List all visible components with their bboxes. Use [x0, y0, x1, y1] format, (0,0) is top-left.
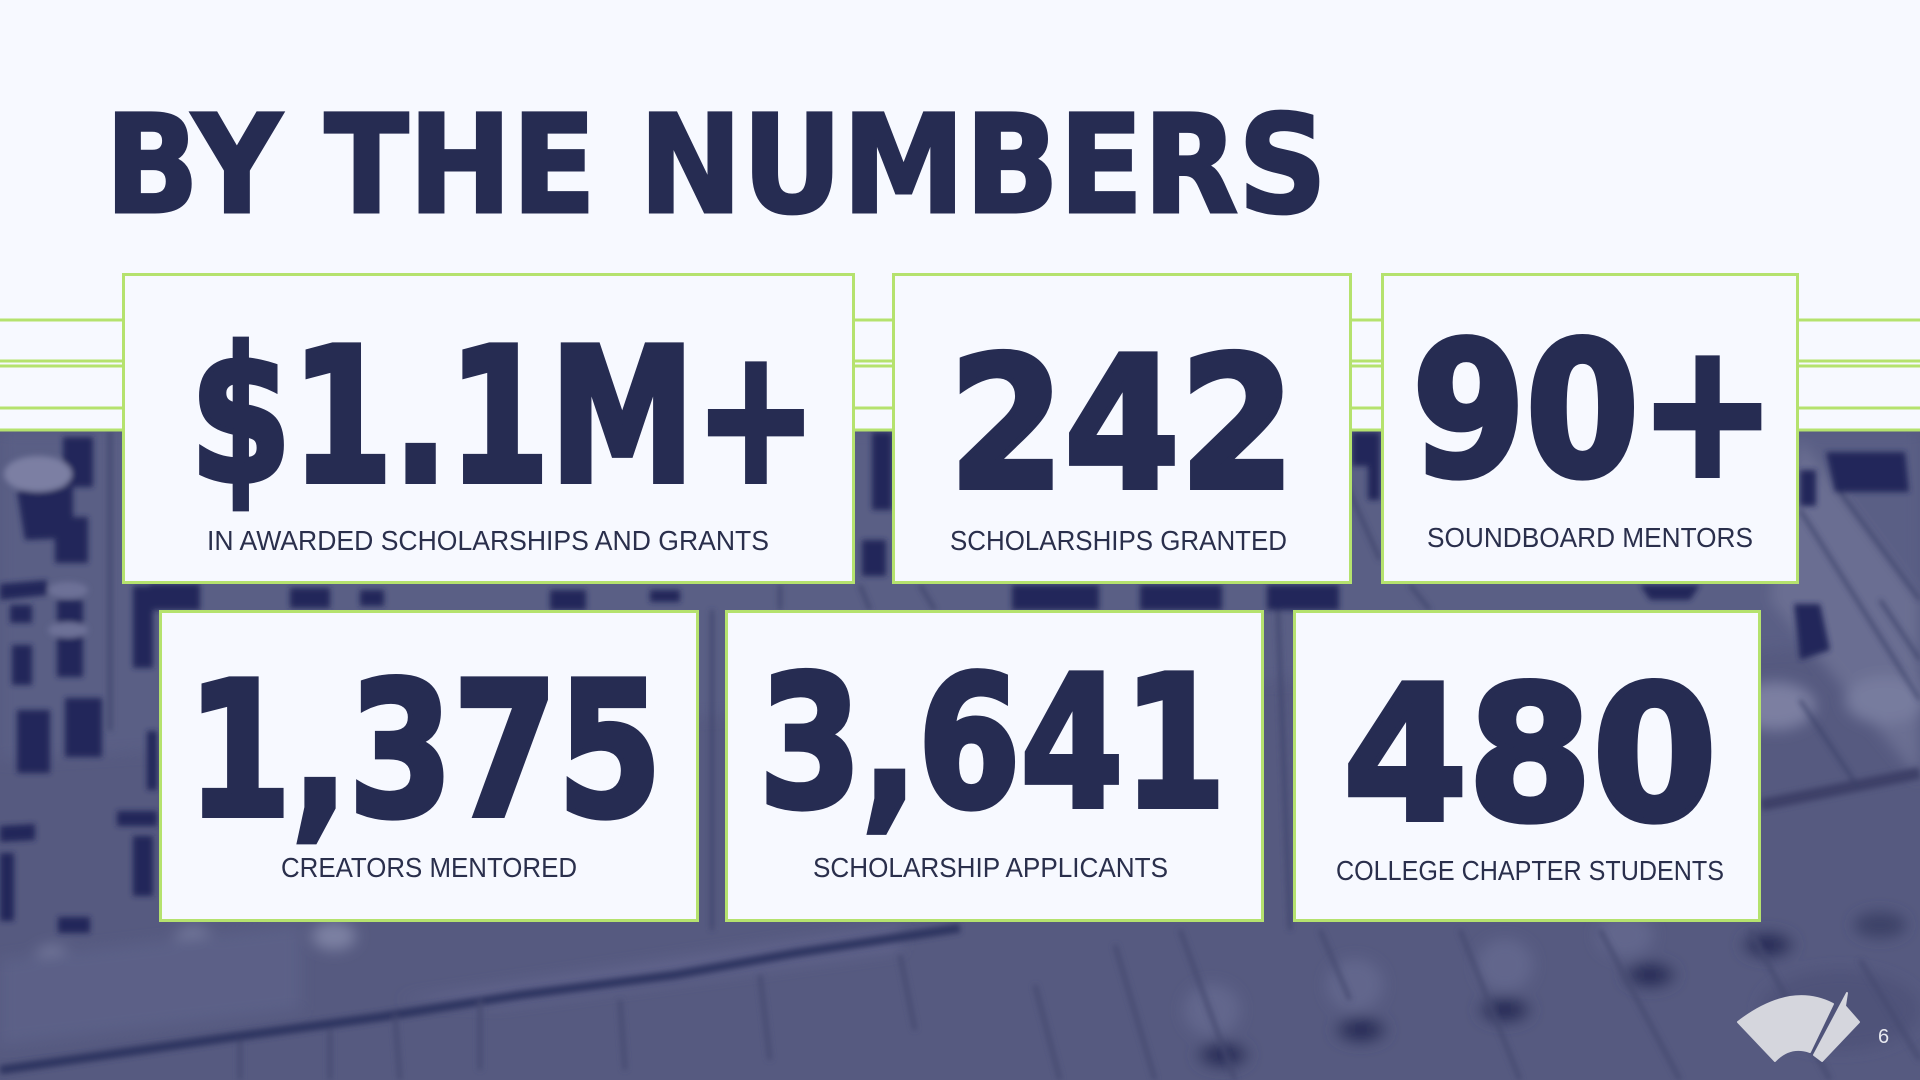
right side faders [1794, 452, 1909, 660]
title: BY THE NUMBERS [105, 87, 1327, 245]
label: scholarships granted: SCHOLARSHIPS GRANTED [950, 525, 1287, 556]
stat: 242: 242 [949, 318, 1295, 530]
panel: scholarship applicants [726, 612, 1262, 920]
label: college chapter students: COLLEGE CHAPTER STUDENTS [1336, 855, 1724, 886]
panel: college chapter students [1294, 612, 1760, 920]
label: soundboard mentors: SOUNDBOARD MENTORS [1427, 522, 1753, 553]
icon: fan logo [1738, 993, 1859, 1061]
panel: creators mentored [160, 612, 698, 920]
gap between top row panels [150, 432, 1700, 610]
panel: scholarships granted [894, 274, 1350, 582]
decorative band lines [0, 320, 1920, 430]
stat: 480: 480 [1343, 646, 1717, 863]
stat: 90+: 90+ [1412, 302, 1776, 519]
panel: soundboard mentors [1382, 274, 1798, 582]
label: scholarship applicants: SCHOLARSHIP APPLICANTS [813, 852, 1168, 883]
stat: 1,375: 1,375 [187, 642, 662, 859]
page number: 6 [1878, 1026, 1889, 1048]
left side components [0, 437, 157, 933]
stat: $1.1M+: $1.1M+ [190, 308, 817, 525]
label: in awarded scholarships and grants: IN AWARDED SCHOLARSHIPS AND GRANTS [207, 525, 769, 556]
stat: 3,641: 3,641 [759, 637, 1226, 849]
background photo: mixing console [0, 431, 1920, 1080]
label: creators mentored: CREATORS MENTORED [281, 852, 577, 883]
panel: scholarships and grants total [124, 274, 854, 582]
